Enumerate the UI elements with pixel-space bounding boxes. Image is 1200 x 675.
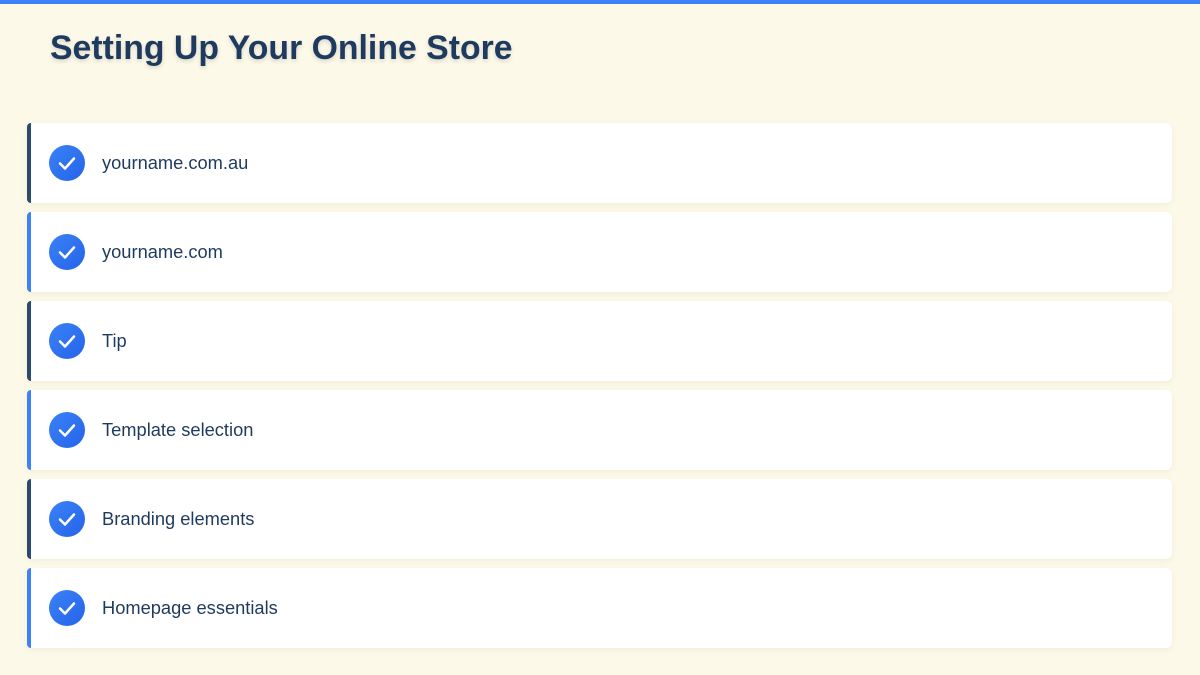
- card: Tip: Tip: [102, 330, 127, 351]
- icon: check: [49, 145, 85, 181]
- card: Tip: [27, 301, 1172, 381]
- icon: check: [49, 590, 85, 626]
- title: Setting Up Your Online Store: [50, 29, 513, 67]
- icon: check: [49, 501, 85, 537]
- card: Homepage essentials: [27, 568, 1172, 648]
- card: Branding elements: Branding elements: [102, 508, 254, 529]
- card: Template selection: [27, 390, 1172, 470]
- card: Template selection: Template selection: [102, 419, 253, 440]
- card: Branding elements: [27, 479, 1172, 559]
- card: yourname.com.au: [27, 123, 1172, 203]
- card: yourname.com: [27, 212, 1172, 292]
- icon: check: [49, 323, 85, 359]
- icon: check: [49, 234, 85, 270]
- card: Homepage essentials: Homepage essentials: [102, 597, 278, 618]
- card: yourname.com: yourname.com: [102, 241, 223, 262]
- icon: check: [49, 412, 85, 448]
- card: yourname.com.au: yourname.com.au: [102, 152, 248, 173]
